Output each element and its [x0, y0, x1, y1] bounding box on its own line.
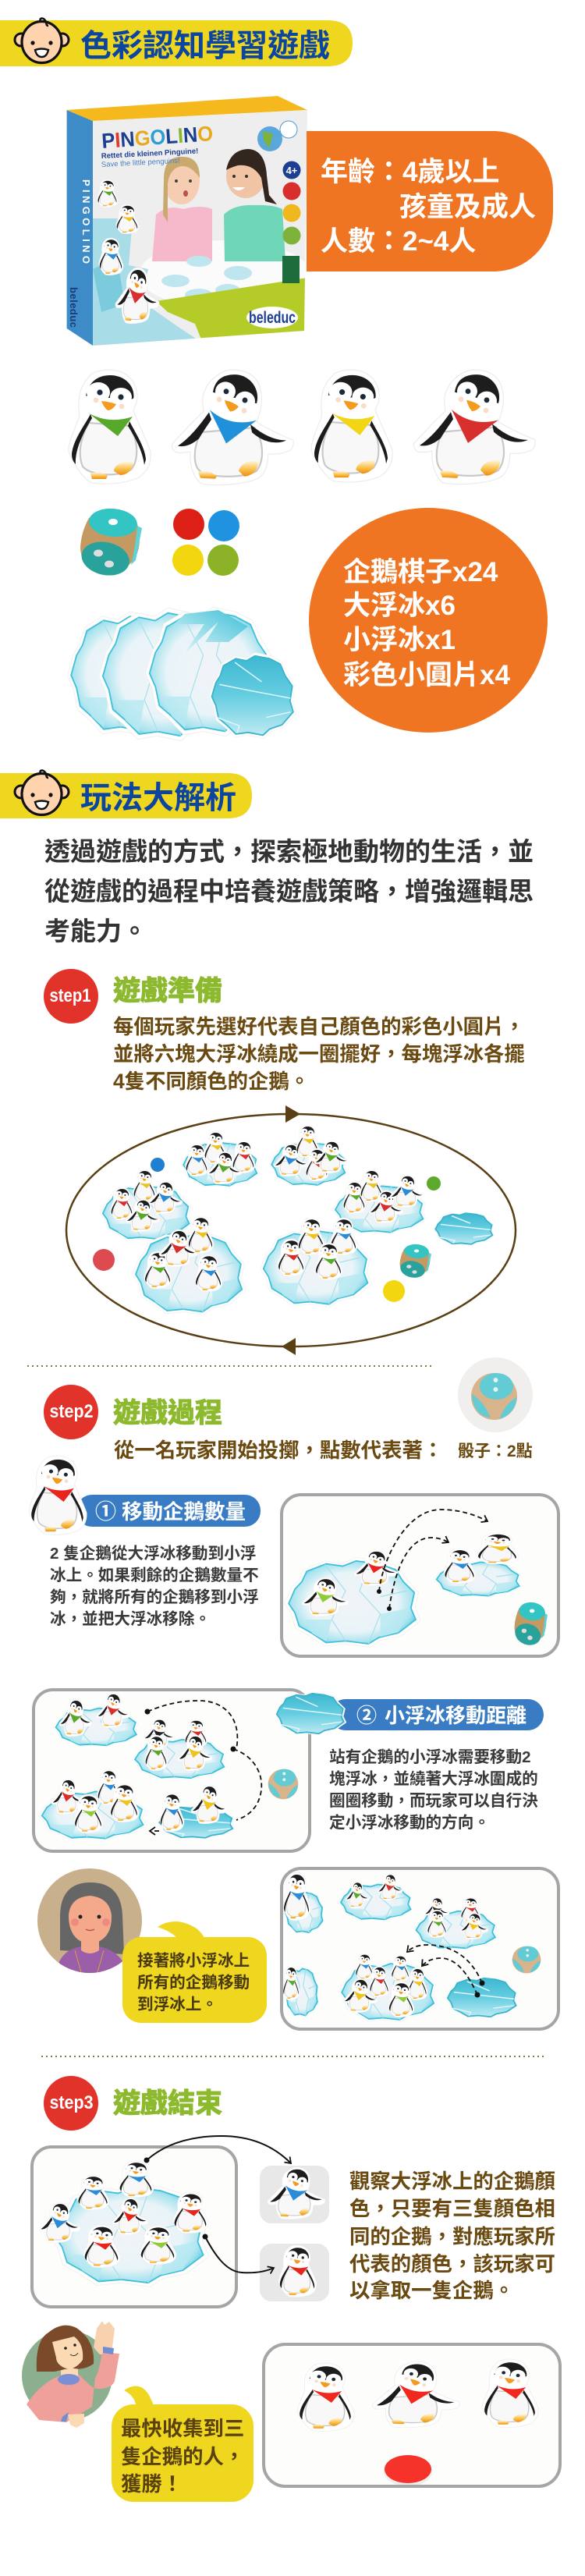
text: move penguin count: 冰上。如果剩餘的企鵝數量不	[50, 1566, 259, 1584]
arrows: to tiles	[144, 2136, 291, 2273]
ice shard highlight	[174, 610, 248, 653]
game box photo: beleduc	[249, 309, 296, 327]
game box photo: PINGOLINO	[80, 179, 92, 264]
step 2 intro text: 從一名玩家開始投擲，點數代表著：	[114, 1439, 443, 1462]
callout: move onto floe: 接著將小浮冰上	[137, 1952, 250, 1970]
callout: move onto floe: 所有的企鵝移動	[137, 1973, 250, 1992]
game board setup	[93, 1125, 495, 1315]
step 3 text: 同的企鵝，對應玩家所	[349, 2225, 555, 2248]
icon: small floe	[275, 1692, 346, 1735]
components count panel: 小浮冰x1	[343, 625, 456, 655]
text: move penguin count	[50, 1544, 259, 1628]
callout: move onto floe: 到浮冰上。	[137, 1996, 218, 2014]
step 1 text: 每個玩家先選好代表自己顏色的彩色小圓片，	[113, 1015, 525, 1038]
step 3 heading	[44, 2076, 222, 2131]
step 3 text: 觀察大浮冰上的企鵝顏	[349, 2170, 555, 2193]
girl left	[152, 157, 212, 261]
age and players info panel: 年齡：4歲以上	[321, 157, 499, 187]
tile: blue penguin	[260, 2166, 329, 2223]
arrows: penguins land	[407, 1945, 482, 1995]
step 2 heading: 遊戲過程	[113, 1391, 222, 1431]
step 2 heading	[44, 1385, 222, 1439]
components count panel: 彩色小圓片x4	[343, 660, 510, 690]
text: small floe distance: 定小浮冰移動的方向。	[329, 1813, 490, 1832]
arrows: penguin moves	[379, 1510, 488, 1609]
heading: move penguin count: ①	[95, 1500, 116, 1524]
badges	[282, 161, 301, 179]
panel: three red penguins photo	[264, 2344, 560, 2486]
step 1 heading: step1	[50, 985, 90, 1006]
components count panel: 大浮冰x6	[343, 591, 456, 621]
callout: winner: 隻企鵝的人，	[121, 2445, 244, 2468]
heading: small floe distance	[275, 1692, 544, 1735]
colour chips	[172, 509, 239, 576]
icon: baby face	[15, 19, 69, 62]
panel: penguins moved to floe photo	[282, 1868, 558, 2029]
girl right	[224, 149, 285, 261]
intro paragraph: 從遊戲的過程中培養遊戲策略，增強邏輯思	[44, 877, 534, 906]
callout: winner: 獲勝！	[121, 2472, 183, 2496]
step 3 text: 以拿取一隻企鵝。	[349, 2279, 514, 2302]
heading: move penguin count: 移動企鵝數量	[122, 1500, 246, 1524]
text: small floe distance: 塊浮冰，並繞著大浮冰圍成的	[329, 1769, 538, 1788]
character: waving woman	[22, 2321, 119, 2428]
intro paragraph	[44, 837, 534, 946]
game box photo: 4+	[286, 165, 298, 176]
callout: winner: 最快收集到三	[121, 2417, 244, 2440]
heading: small floe distance: ②	[356, 1704, 377, 1727]
step 1 text: 並將六塊大浮冰繞成一圈擺好，每塊浮冰各擺	[113, 1042, 525, 1066]
circular arrow around the board	[66, 1105, 516, 1355]
game box photo: Rettet die kleinen Pinguine!	[101, 147, 199, 161]
intro paragraph: 透過遊戲的方式，探索極地動物的生活，並	[44, 837, 534, 866]
step 3 heading: 遊戲結束	[113, 2081, 222, 2121]
text: small floe distance: 圈圈移動，而玩家可以自行決	[329, 1791, 538, 1810]
text: move penguin count: 冰，並把大浮冰移除。	[50, 1609, 211, 1628]
dice caption: 骰子：2點	[458, 1442, 533, 1460]
arrows: floe path	[147, 1701, 261, 1831]
step 1 heading	[44, 969, 222, 1024]
text: small floe distance: 站有企鵝的小浮冰需要移動2	[329, 1747, 531, 1766]
icon: dice showing two	[458, 1357, 533, 1432]
panel: moving small floe photo	[34, 1690, 310, 1851]
age and players info panel: 孩童及成人	[399, 192, 536, 222]
icon: dice	[79, 506, 142, 580]
callout: winner	[112, 2386, 254, 2502]
penguin pieces row	[69, 370, 535, 485]
banner title: 玩法大解析	[80, 772, 236, 818]
game box photo	[67, 96, 310, 347]
ice floes	[68, 607, 296, 741]
step 3 heading: step3	[50, 2092, 94, 2113]
text: small floe distance	[329, 1747, 538, 1832]
section banner: 玩法大解析	[0, 771, 252, 818]
callout: move onto floe	[122, 1921, 267, 2023]
step 1 text: 4隻不同顏色的企鵝。	[113, 1070, 310, 1093]
step 1 heading: 遊戲準備	[113, 969, 222, 1009]
heading: small floe distance: 小浮冰移動距離	[385, 1704, 526, 1727]
components count panel: 企鵝棋子x24	[343, 557, 498, 587]
intro paragraph: 考能力。	[44, 917, 147, 946]
icon: dice	[399, 1244, 431, 1280]
step 3 text: 代表的顏色，該玩家可	[349, 2252, 555, 2276]
banner title: 色彩認知學習遊戲	[80, 20, 330, 66]
heading: move penguin count	[76, 1495, 261, 1527]
logo PINGOLINO: PINGOLINO	[101, 122, 214, 153]
icon: penguin	[29, 1456, 87, 1535]
game box photo: beleduc	[68, 287, 80, 328]
text: move penguin count: 2 隻企鵝從大浮冰移動到小浮	[50, 1544, 256, 1563]
step 2 heading: step2	[50, 1401, 94, 1422]
components count panel	[309, 508, 548, 733]
step 3 text: 色，只要有三隻顏色相	[349, 2197, 555, 2220]
age and players info panel: 人數：2~4人	[321, 226, 476, 257]
game box photo: Save the little penguins!	[101, 157, 180, 169]
panel: three matching penguins photo	[32, 2147, 236, 2307]
tile: red penguin	[260, 2244, 329, 2301]
step 1 text	[113, 1015, 525, 1093]
step 3 text	[349, 2170, 555, 2302]
character: grey-haired woman	[37, 1868, 142, 1974]
icon: baby face	[15, 771, 69, 814]
age and players info panel	[307, 131, 553, 271]
text: move penguin count: 夠，就將所有的企鵝移到小浮	[50, 1588, 259, 1606]
section banner: 色彩認知學習遊戲	[0, 19, 353, 66]
panel: moving penguins photo	[282, 1495, 558, 1656]
